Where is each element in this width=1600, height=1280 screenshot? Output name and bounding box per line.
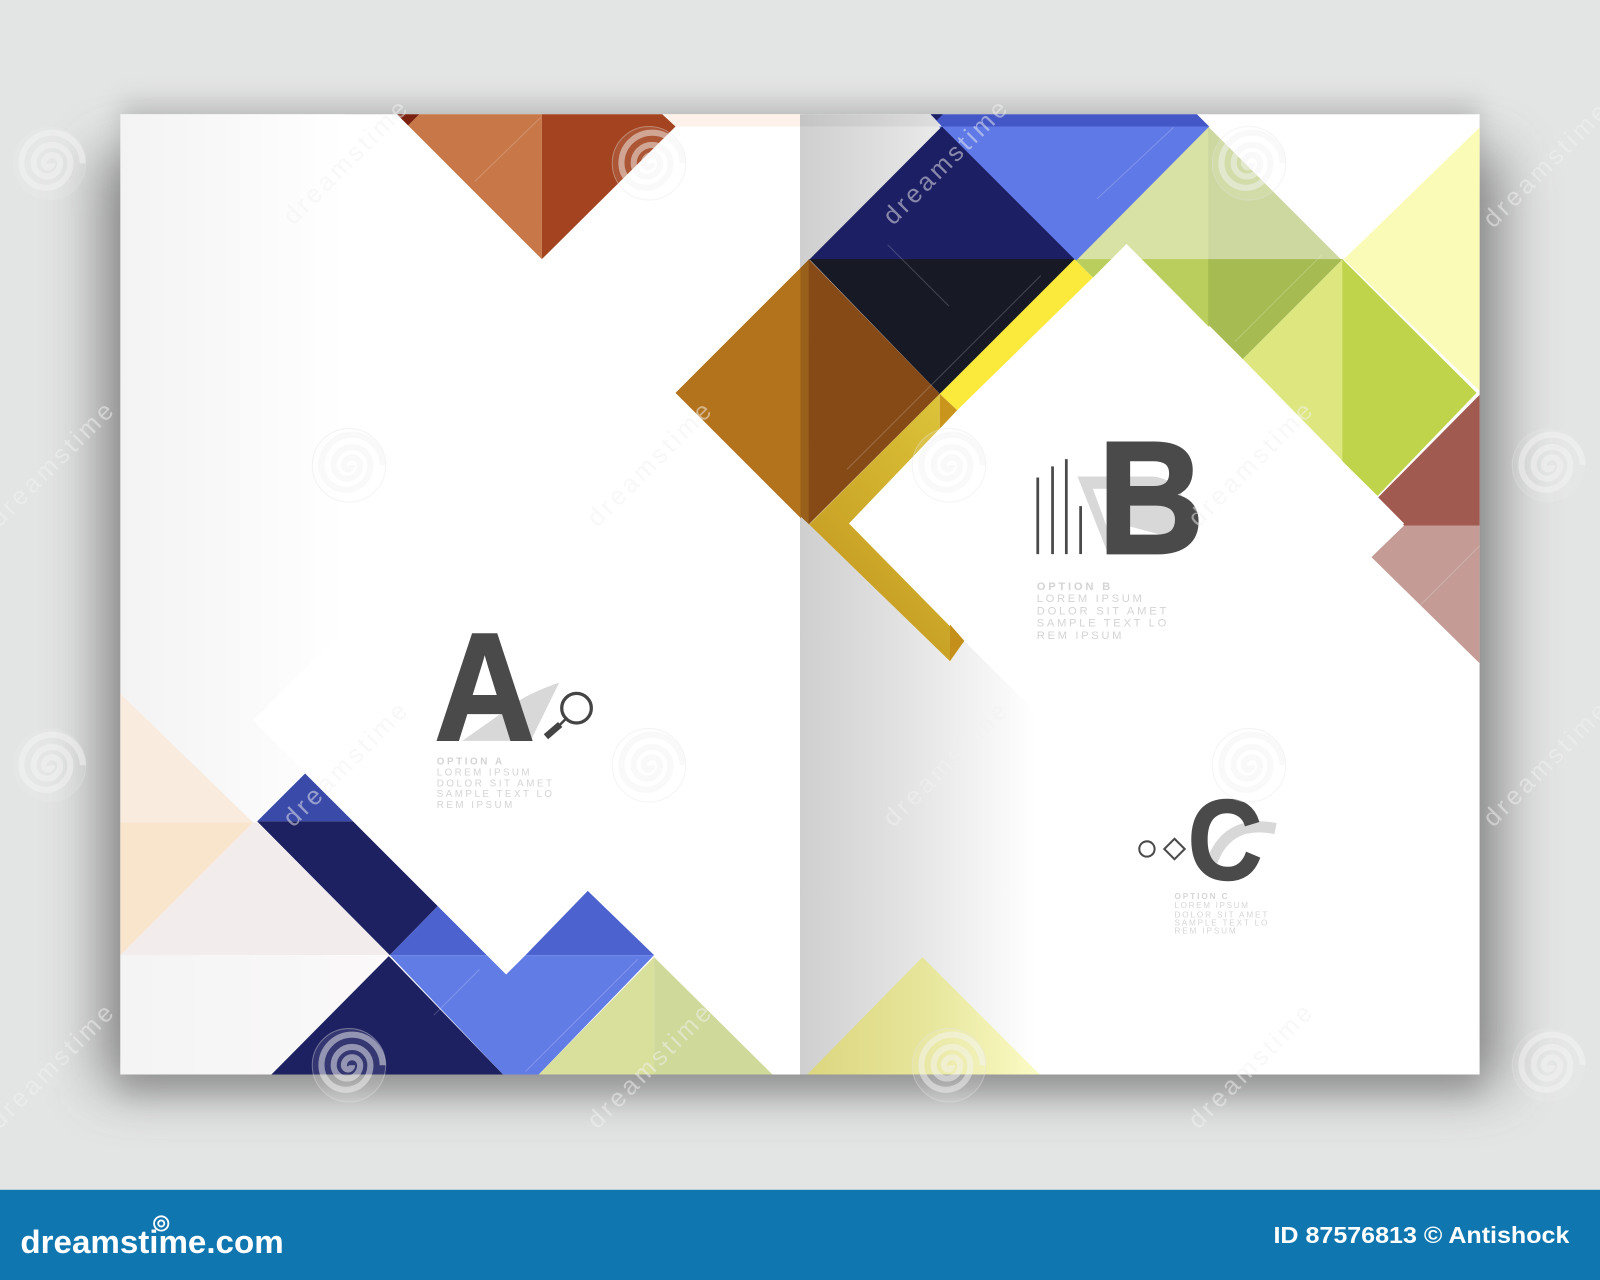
watermark thin lines xyxy=(434,117,1480,1071)
option A block xyxy=(435,602,591,811)
icon: circle xyxy=(1139,841,1155,857)
option B text: DOLOR SIT AMET xyxy=(1037,605,1166,617)
navy tip xyxy=(931,114,943,120)
green under band right xyxy=(1208,259,1343,359)
watermark text: dreamstime xyxy=(278,95,413,230)
green bottom triangle right xyxy=(654,957,772,1074)
option C text: DOLOR SIT AMET xyxy=(1174,910,1267,919)
option A text xyxy=(437,756,552,811)
option C text: REM IPSUM xyxy=(1174,927,1236,936)
panel: right brochure page xyxy=(676,114,1480,1074)
option A text: DOLOR SIT AMET xyxy=(437,779,552,790)
navy triangle xyxy=(809,127,1075,260)
watermark text: dreamstime xyxy=(582,397,717,532)
image id and author: ID 87576813 © Antishock xyxy=(1273,1222,1570,1248)
watermark text: dreamstime xyxy=(278,697,413,832)
pale orange triangle lower xyxy=(120,822,253,955)
icon: magnifying glass xyxy=(546,693,591,737)
pink triangle xyxy=(1371,526,1480,663)
option B text xyxy=(1037,581,1167,642)
bright lime xyxy=(1342,259,1477,496)
option C text: SAMPLE TEXT LO xyxy=(1174,919,1267,928)
pale orange triangle upper xyxy=(120,694,253,822)
brown diamond left xyxy=(676,267,801,518)
letter A: A xyxy=(435,602,535,773)
blue triangle xyxy=(939,127,1209,260)
option B text: REM IPSUM xyxy=(1037,630,1121,642)
navy band xyxy=(257,821,438,955)
green bottom triangle left xyxy=(539,957,654,1074)
option C block xyxy=(1139,778,1276,936)
letter B shadow xyxy=(1078,477,1184,554)
left page soft gradient xyxy=(120,114,345,1074)
watermark spirals xyxy=(12,127,1586,1102)
option A text: SAMPLE TEXT LO xyxy=(437,789,552,800)
brown diamond middle band xyxy=(801,259,809,524)
pale pink triangle xyxy=(120,822,390,955)
option B text: LOREM IPSUM xyxy=(1037,593,1142,605)
watermark text: dreamstime xyxy=(878,95,1013,230)
grey gradient top xyxy=(800,114,954,269)
panel: left brochure page xyxy=(120,114,803,1074)
icon: diamond xyxy=(1164,839,1185,859)
letter C shadow xyxy=(1210,827,1276,867)
top brown triangle dark tip xyxy=(397,114,419,126)
gold chevron xyxy=(809,394,964,661)
red-brown triangle xyxy=(1378,395,1480,526)
pale yellow triangle xyxy=(1344,128,1480,391)
top brown triangle dark half xyxy=(542,114,676,259)
pale lime triangle xyxy=(1243,259,1343,461)
watermark text: dreamstime xyxy=(582,999,717,1134)
brand logo text: dreamstime.com xyxy=(20,1223,284,1260)
icon: spiral logo xyxy=(154,1216,168,1231)
black triangle xyxy=(809,259,1075,394)
brown diamond right xyxy=(809,259,940,524)
letter C: C xyxy=(1188,778,1262,905)
option B block xyxy=(1037,408,1204,642)
gold inner dark tip xyxy=(940,394,957,429)
letter A shadow xyxy=(462,683,559,741)
gold end dark tip xyxy=(950,624,964,660)
option A text: OPTION A xyxy=(437,756,502,767)
white diamond xyxy=(849,244,1404,653)
footer banner xyxy=(0,1190,1600,1280)
icon: bars xyxy=(1038,459,1081,554)
navy bottom triangle xyxy=(271,956,503,1074)
blue chevron lower xyxy=(390,955,654,1074)
yellow band xyxy=(940,259,1093,410)
green under band left xyxy=(1074,259,1209,394)
grey gradient bottom xyxy=(800,514,1041,1074)
letter B: B xyxy=(1098,408,1204,587)
option C text: LOREM IPSUM xyxy=(1174,901,1248,910)
option B text: SAMPLE TEXT LO xyxy=(1037,618,1167,630)
pale bottom strip xyxy=(120,955,390,1074)
watermark text: dreamstime xyxy=(1183,397,1318,532)
green top triangle left xyxy=(1074,127,1209,260)
pale yellow bottom triangle xyxy=(807,957,1040,1074)
blue top strip xyxy=(931,114,1209,127)
watermark text: dreamstime xyxy=(878,697,1013,832)
navy band top tip xyxy=(257,773,353,821)
top brown triangle light half xyxy=(408,114,542,259)
option B text: OPTION B xyxy=(1037,581,1110,593)
faint top strip xyxy=(663,114,803,127)
page drop shadow xyxy=(100,102,1502,1094)
blue chevron upper right xyxy=(526,891,654,955)
white diamond corner xyxy=(253,565,653,816)
option C text: OPTION C xyxy=(1174,892,1228,901)
blue chevron upper left xyxy=(390,906,487,955)
option A text: LOREM IPSUM xyxy=(437,768,530,779)
watermark text: dreamstime xyxy=(1183,999,1318,1134)
option C text xyxy=(1174,892,1267,936)
green top triangle right xyxy=(1208,127,1342,260)
option A text: REM IPSUM xyxy=(437,800,512,811)
